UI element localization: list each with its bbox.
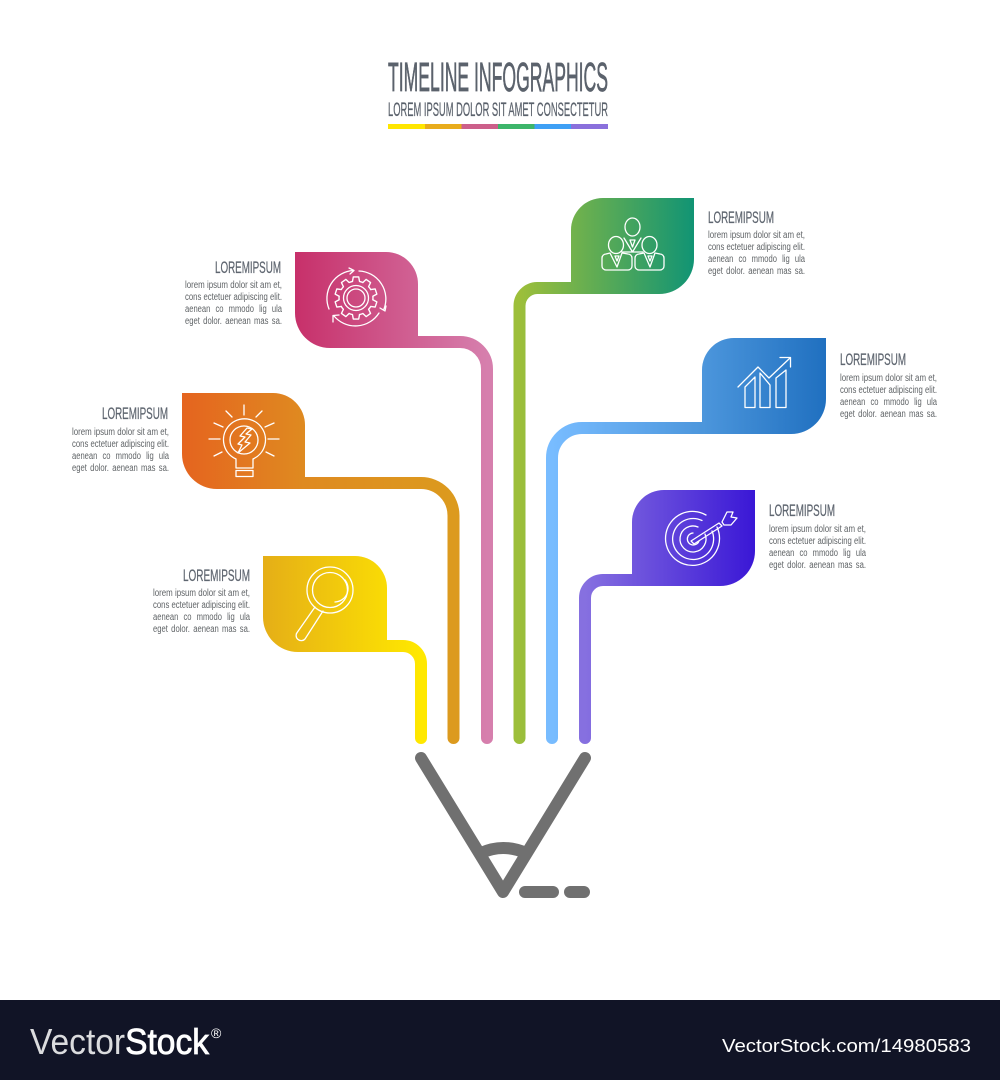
text block: pink: aenean co mmodo lig ula bbox=[185, 304, 282, 315]
text block: pink: lorem ipsum dolor sit am et, bbox=[185, 280, 282, 291]
yellow tab bbox=[263, 556, 387, 652]
text block: purple: LOREMIPSUM bbox=[769, 501, 835, 520]
text block: green: lorem ipsum dolor sit am et, bbox=[708, 230, 805, 241]
green line bbox=[520, 288, 578, 738]
pink tab bbox=[295, 252, 418, 348]
text block: blue: LOREMIPSUM bbox=[840, 350, 906, 369]
text block: purple: lorem ipsum dolor sit am et, bbox=[769, 524, 866, 535]
text block: green: eget dolor. aenean mas sa. bbox=[708, 266, 805, 277]
text block: orange: LOREMIPSUM bbox=[102, 404, 168, 423]
text block: green: cons ectetuer adipiscing elit. bbox=[708, 242, 805, 253]
icon: team of three bbox=[602, 218, 664, 270]
blue tab bbox=[702, 338, 826, 434]
text block: yellow: eget dolor. aenean mas sa. bbox=[153, 624, 250, 635]
text block: blue: aenean co mmodo lig ula bbox=[840, 397, 937, 408]
text block: orange: eget dolor. aenean mas sa. bbox=[72, 463, 169, 474]
text block: orange: lorem ipsum dolor sit am et, bbox=[72, 427, 169, 438]
panel: blue chart step bbox=[552, 338, 937, 738]
icon: rising chart bbox=[738, 358, 790, 408]
footer image id: VectorStock.com/14980583 bbox=[722, 1035, 971, 1056]
text block: purple: eget dolor. aenean mas sa. bbox=[769, 560, 866, 571]
footer logo: VectorStock bbox=[30, 1021, 210, 1062]
footer bar bbox=[0, 1000, 1000, 1080]
text block: green bbox=[708, 208, 805, 277]
text block: blue: lorem ipsum dolor sit am et, bbox=[840, 373, 937, 384]
text: LOREM IPSUM DOLOR SIT AMET CONSECTETUR bbox=[388, 100, 608, 121]
purple line bbox=[585, 580, 640, 738]
icon: magnifier bbox=[296, 567, 353, 641]
text block: orange: aenean co mmodo lig ula bbox=[72, 451, 169, 462]
text block: blue: eget dolor. aenean mas sa. bbox=[840, 409, 937, 420]
panel: pink gear step bbox=[185, 252, 487, 738]
text block: yellow bbox=[153, 566, 250, 635]
registered mark: ® bbox=[211, 1025, 222, 1041]
pink line bbox=[410, 342, 487, 738]
text: TIMELINE INFOGRAPHICS bbox=[388, 54, 608, 100]
text block: yellow: LOREMIPSUM bbox=[183, 566, 250, 585]
text block: orange bbox=[72, 404, 169, 474]
text block: purple: aenean co mmodo lig ula bbox=[769, 548, 866, 559]
icon: gear with arrows bbox=[327, 268, 386, 326]
text block: pink: eget dolor. aenean mas sa. bbox=[185, 316, 282, 327]
panel: orange bulb step bbox=[72, 393, 454, 738]
colour bar bbox=[388, 124, 608, 129]
title block bbox=[388, 54, 608, 129]
panel: yellow magnifier step bbox=[153, 556, 421, 738]
purple tab bbox=[632, 490, 755, 586]
text block: purple bbox=[769, 501, 866, 571]
blue line bbox=[552, 428, 710, 738]
text block: pink: cons ectetuer adipiscing elit. bbox=[185, 292, 282, 303]
text block: blue bbox=[840, 350, 937, 420]
icon: pencil tip bbox=[421, 758, 585, 892]
green tab bbox=[571, 198, 694, 294]
orange line bbox=[297, 483, 454, 738]
icon: light bulb bbox=[209, 405, 279, 476]
text block: pink: LOREMIPSUM bbox=[215, 258, 281, 277]
orange tab bbox=[182, 393, 305, 489]
text block: yellow: cons ectetuer adipiscing elit. bbox=[153, 600, 250, 611]
panel: green team step bbox=[520, 198, 805, 738]
text block: green: aenean co mmodo lig ula bbox=[708, 254, 805, 265]
text block: orange: cons ectetuer adipiscing elit. bbox=[72, 439, 169, 450]
text block: yellow: lorem ipsum dolor sit am et, bbox=[153, 588, 250, 599]
text block: purple: cons ectetuer adipiscing elit. bbox=[769, 536, 866, 547]
text block: yellow: aenean co mmodo lig ula bbox=[153, 612, 250, 623]
text block: pink bbox=[185, 258, 282, 327]
icon: target with arrow bbox=[666, 511, 737, 565]
text block: blue: cons ectetuer adipiscing elit. bbox=[840, 385, 937, 396]
text block: green: LOREMIPSUM bbox=[708, 208, 774, 227]
panel: purple target step bbox=[585, 490, 866, 738]
yellow line bbox=[380, 646, 421, 738]
